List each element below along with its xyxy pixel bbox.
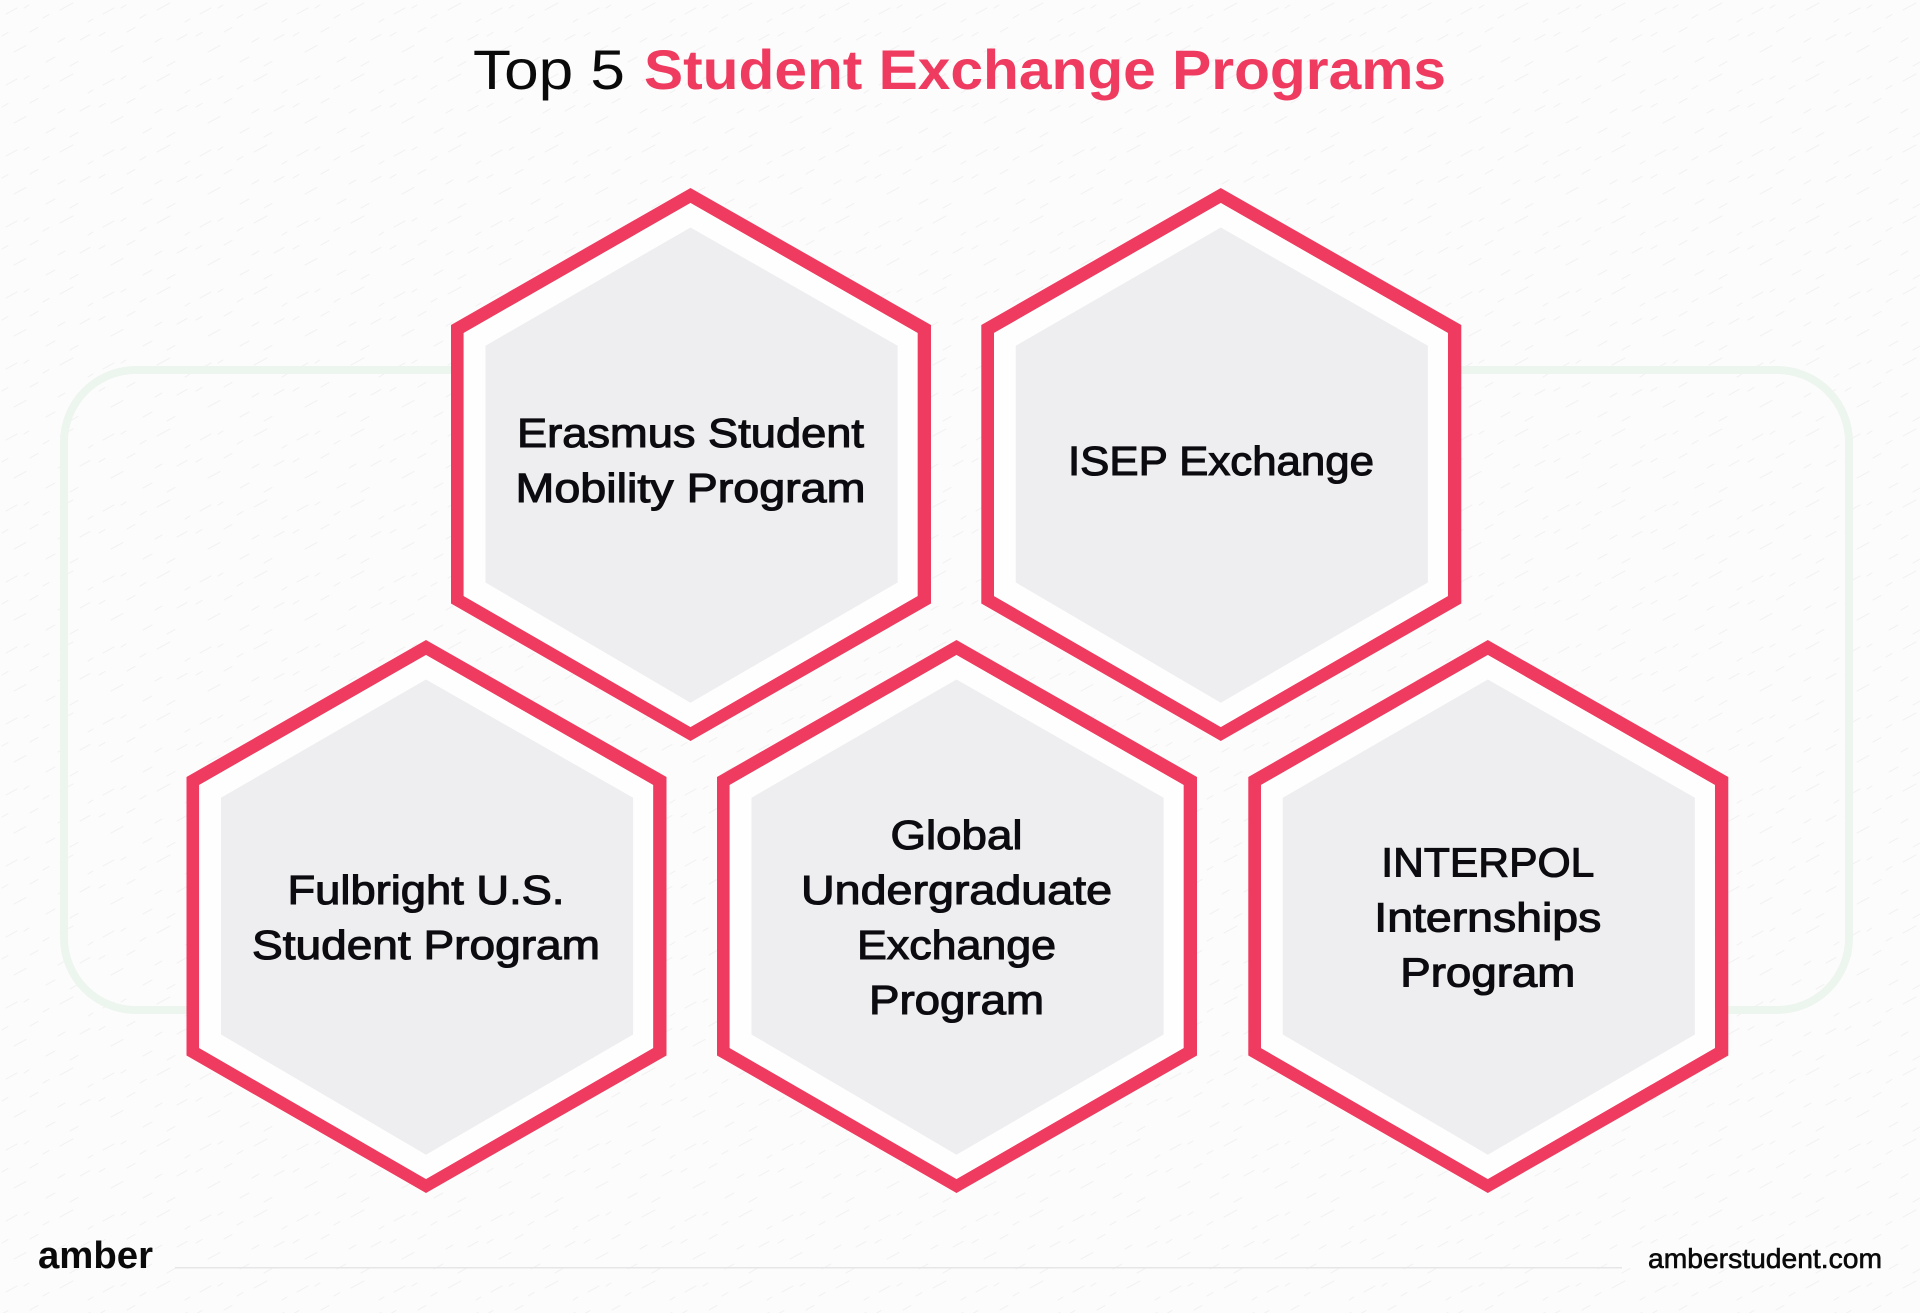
title: Student Exchange Programs [644,38,1446,101]
hexagon: INTERPOL Internships Program: Program [1400,950,1575,996]
title: Top 5 [473,38,625,101]
hexagon: Global Undergraduate Exchange Program: Undergraduate [801,867,1112,913]
hexagon: ISEP Exchange [981,188,1461,741]
background rounded panel [64,370,1849,1010]
hexagon: Erasmus Student Mobility Program [451,188,931,741]
hexagon: Erasmus Student Mobility Program: Mobility Program [516,465,866,511]
hexagon: Erasmus Student Mobility Program: Erasmus Student [517,410,865,456]
hexagon: Global Undergraduate Exchange Program: Program [869,977,1044,1023]
hexagon: INTERPOL Internships Program [1248,640,1728,1193]
hexagon: Fulbright U.S. Student Program [186,640,666,1193]
hexagon: Fulbright U.S. Student Program: Fulbright U.S. [288,867,564,913]
hexagon: ISEP Exchange: ISEP Exchange [1068,438,1374,484]
hexagon: INTERPOL Internships Program: INTERPOL [1381,840,1594,886]
hexagon: Global Undergraduate Exchange Program: Exchange [857,922,1056,968]
hexagon: INTERPOL Internships Program: Internships [1374,894,1601,940]
footer divider [175,1267,1622,1269]
hexagon: Fulbright U.S. Student Program: Student Program [252,922,600,968]
hexagon: Global Undergraduate Exchange Program [717,640,1197,1193]
logo: amber: amber [38,1235,153,1277]
hexagon: Global Undergraduate Exchange Program: Global [890,812,1022,858]
website url: amberstudent.com [1648,1243,1882,1274]
